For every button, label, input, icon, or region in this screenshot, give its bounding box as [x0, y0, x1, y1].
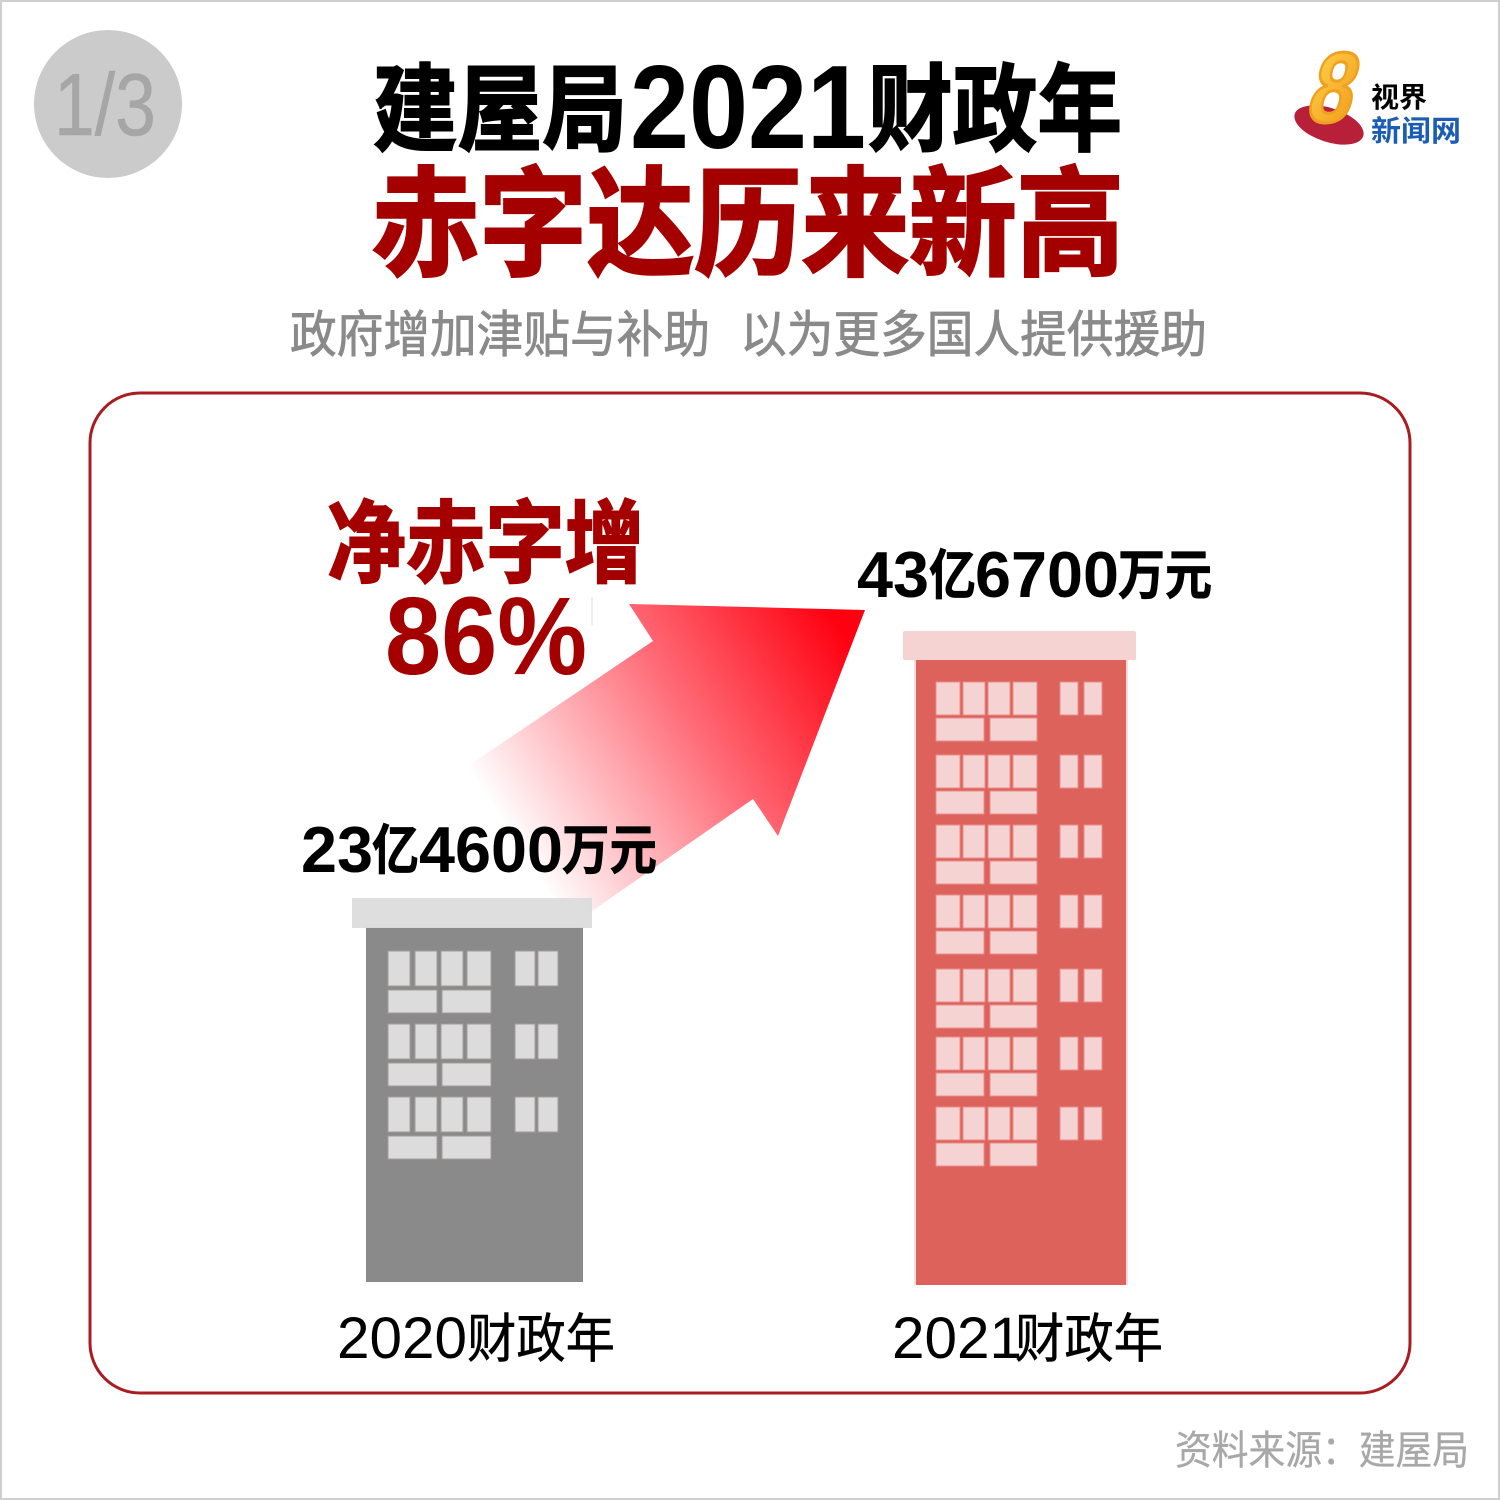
- page number badge: 1/3: [54, 55, 156, 154]
- title: 2021: [630, 41, 866, 174]
- value label 2020: 23: [301, 813, 373, 886]
- title: [372, 41, 1124, 292]
- source note: 资料来源：建屋局: [1175, 1429, 1469, 1473]
- page number badge: [34, 30, 182, 178]
- subtitle: 政府增加津贴与补助: [290, 307, 710, 363]
- title: 财政年: [868, 58, 1122, 164]
- value label 2021: 亿: [929, 546, 976, 606]
- title: 建屋局: [373, 58, 627, 164]
- title: 赤字达历来新高: [372, 160, 1124, 292]
- subtitle: [290, 307, 1207, 363]
- building: 2020 grey: [352, 898, 592, 1282]
- callout: net deficit increase: 净赤字增: [327, 495, 644, 595]
- callout: net deficit increase: 86%: [385, 575, 587, 698]
- axis label 2020: [337, 1306, 615, 1371]
- value label 2020: 万元: [562, 821, 657, 881]
- value label 2021: 万元: [1118, 546, 1212, 606]
- subtitle: 以为更多国人提供援助: [740, 307, 1207, 363]
- callout: net deficit increase: [327, 495, 644, 698]
- axis label 2021: 2021: [892, 1306, 1022, 1371]
- value label 2020: 亿: [372, 821, 419, 881]
- axis label 2021: 财政年: [1015, 1310, 1163, 1369]
- axis label 2020: 2020: [337, 1306, 467, 1371]
- logo: 8视界新闻网: 新闻网: [1371, 115, 1461, 148]
- axis label 2020: 财政年: [467, 1310, 615, 1369]
- logo: 8视界新闻网: 8: [1299, 31, 1371, 144]
- axis label 2021: [892, 1306, 1163, 1371]
- building: 2021 red: [903, 631, 1136, 1285]
- logo: 8视界新闻网: [1290, 31, 1461, 152]
- value label 2020: [301, 813, 657, 886]
- value label 2020: 4600: [419, 813, 563, 886]
- logo: 8视界新闻网: 视界: [1371, 82, 1427, 113]
- value label 2021: 6700: [975, 538, 1119, 611]
- value label 2021: [857, 538, 1212, 611]
- main panel: [90, 393, 1410, 1393]
- value label 2021: 43: [857, 538, 929, 611]
- arrow: rising deficit: [468, 604, 865, 925]
